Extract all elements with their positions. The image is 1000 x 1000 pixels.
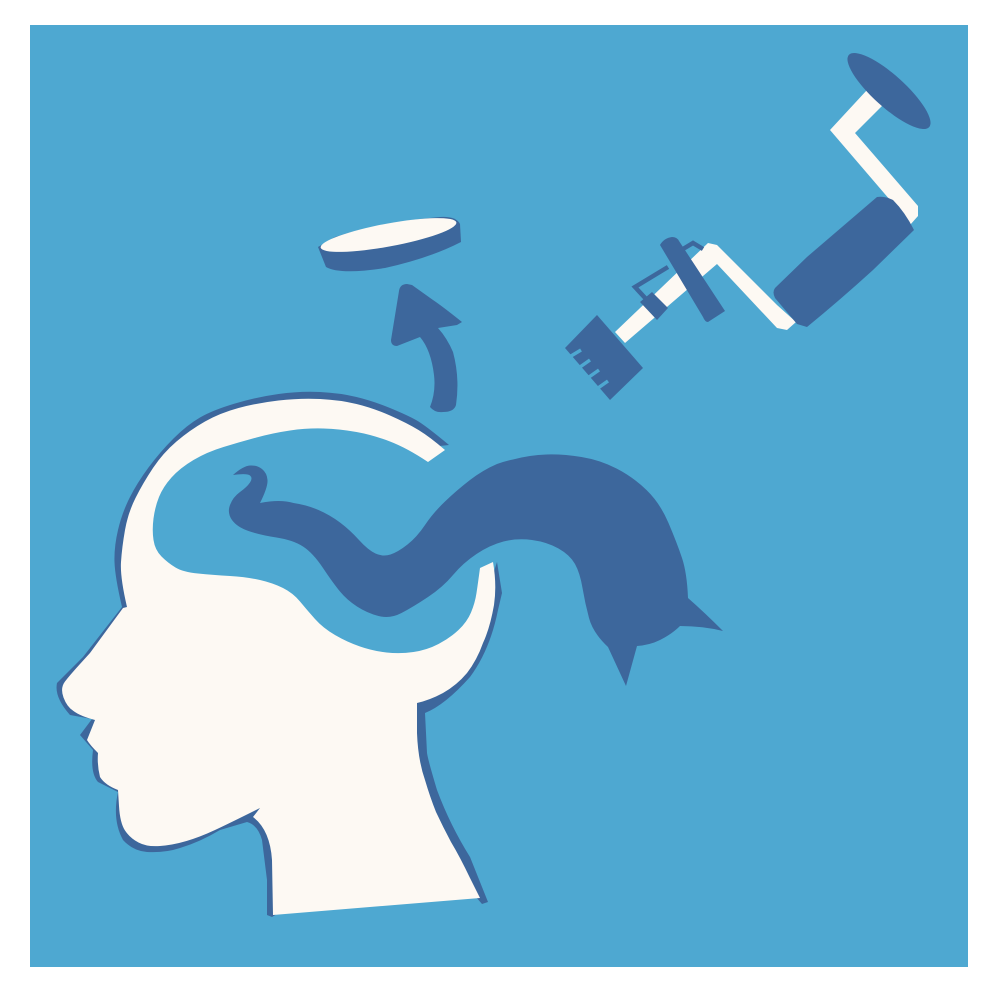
drill bracket	[635, 243, 703, 300]
drill bit head	[565, 315, 643, 400]
drill collar	[640, 292, 668, 320]
drill chuck disc	[660, 237, 725, 322]
blue serpentine ribbon leaving the brain	[229, 454, 723, 686]
drill white frame lower crank and shaft	[615, 243, 796, 343]
disc top	[319, 211, 458, 259]
drill bit teeth	[571, 350, 608, 388]
head silhouette	[62, 399, 495, 915]
drill tool	[565, 43, 940, 400]
lifted disc lid	[318, 211, 461, 271]
drill top knob	[838, 43, 940, 139]
head profile	[57, 392, 502, 917]
drill handle grip	[774, 197, 914, 327]
arrow: upward curved	[391, 284, 462, 412]
drill white frame upper crank	[830, 90, 918, 225]
disc side	[318, 217, 461, 271]
head outline	[57, 392, 502, 917]
